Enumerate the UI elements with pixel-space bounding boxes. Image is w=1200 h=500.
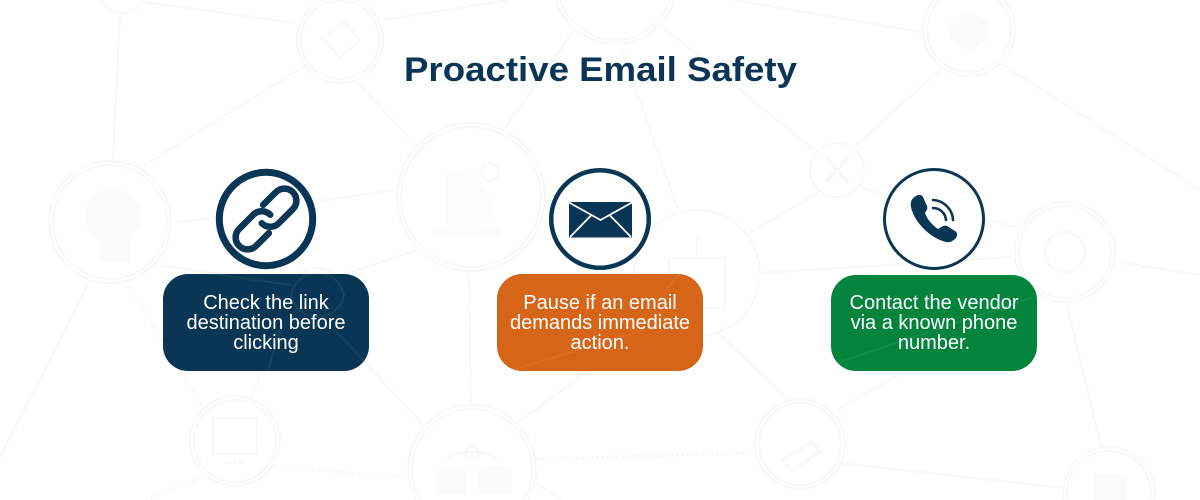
card: contact the vendor via a known phone number (831, 275, 1037, 371)
icon: envelope in circle (548, 168, 652, 270)
tip 3: contact the vendor (831, 168, 1037, 371)
card: check the link destination: Check the link (203, 292, 329, 314)
card: pause if an email demands immediate action: action. (571, 332, 629, 354)
card: check the link destination (163, 274, 369, 371)
card: check the link destination: destination before (186, 312, 346, 334)
tip 1: check the link (163, 168, 369, 371)
card: contact the vendor via a known phone number: number. (898, 332, 970, 354)
card: pause if an email demands immediate action: demands immediate (510, 312, 690, 334)
tip 2: pause on urgency (497, 168, 703, 371)
title: Proactive Email Safety (404, 51, 797, 89)
card: contact the vendor via a known phone number: Contact the vendor (850, 292, 1018, 314)
card: check the link destination: clicking (233, 332, 299, 354)
card: pause if an email demands immediate action: Pause if an email (523, 292, 677, 314)
card: pause if an email demands immediate action (497, 274, 703, 371)
icon: phone in circle (883, 168, 985, 270)
icon: chain link in circle (216, 168, 316, 270)
card: contact the vendor via a known phone number: via a known phone (851, 312, 1017, 334)
